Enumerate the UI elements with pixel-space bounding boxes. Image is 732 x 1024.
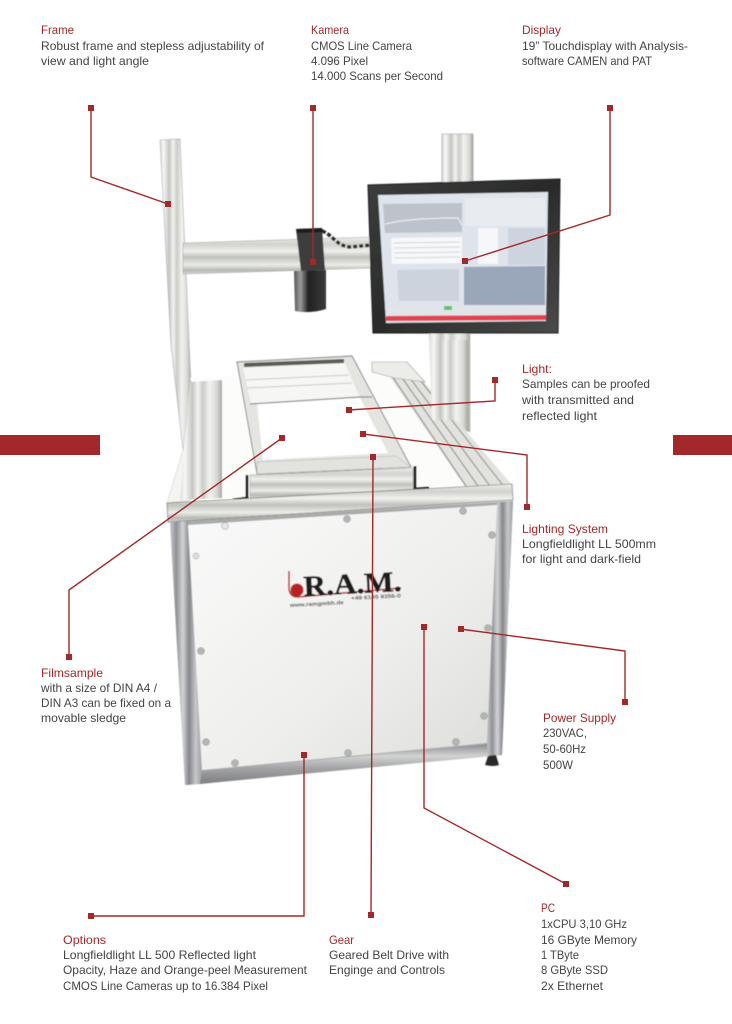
text block: lighting system: Longfieldlight LL 500mm [522, 537, 656, 551]
text block: pc: 8 GByte SSD [541, 963, 608, 977]
sledge sample window [257, 398, 388, 460]
text block: pc: 1xCPU 3,10 GHz [541, 917, 627, 931]
leader: pc [421, 624, 569, 887]
logo phone: +49 6145 9356-0 [351, 593, 401, 602]
text block: power supply: 230VAC, [543, 726, 587, 740]
camera cable [322, 231, 372, 247]
text block: gear: Enginge and Controls [329, 963, 445, 977]
text block: kamera: 14.000 Scans per Second [311, 69, 443, 83]
monitor screen [378, 192, 548, 323]
text block: kamera [311, 23, 443, 83]
text block: frame: view and light angle [41, 54, 149, 68]
text block: frame: Frame [41, 23, 74, 37]
screen chart panel [383, 203, 462, 233]
screen bottom-left view [397, 269, 459, 301]
cabinet white panel [188, 505, 497, 770]
leader: kamera [310, 105, 316, 265]
camera lens [294, 270, 326, 312]
text block: gear: Geared Belt Drive with [329, 948, 449, 962]
text block: power supply: Power Supply [543, 711, 616, 725]
text block: gear [329, 933, 449, 977]
text block: light: reflected light [522, 409, 598, 423]
camera assembly [294, 228, 372, 312]
logo red swoosh [289, 571, 401, 597]
text block: display: Display [522, 23, 561, 37]
screen red status bar [386, 315, 546, 321]
leader: power supply [458, 626, 628, 705]
text block: kamera: 4.096 Pixel [311, 54, 368, 68]
leader: frame [88, 105, 171, 207]
cabinet outer frame [170, 501, 513, 785]
screen bottom-right view [464, 266, 545, 305]
text block: display [522, 23, 688, 68]
sledge upper opening [243, 363, 360, 404]
screen options panel [508, 228, 545, 265]
text block: light: with transmitted and [521, 393, 634, 407]
text block: display: software CAMEN and PAT [522, 54, 653, 68]
logo website: www.ramgmbh.de [289, 600, 344, 609]
text block: frame [41, 23, 265, 68]
text block: options: Options [63, 933, 106, 947]
frame: rear upright post, lower [429, 330, 470, 432]
text block: kamera: Kamera [311, 23, 349, 37]
screen table rows [394, 242, 460, 258]
light housing block [372, 362, 425, 382]
camera body top [296, 228, 323, 233]
right red band [673, 435, 732, 455]
R.A.M. logo [289, 566, 402, 609]
text block: power supply: 500W [543, 758, 574, 772]
front top rail [167, 484, 513, 522]
text block: kamera: CMOS Line Camera [311, 39, 412, 53]
logo red dot [290, 584, 304, 596]
text block: gear: Gear [329, 933, 354, 947]
text block: filmsample: Filmsample [41, 666, 103, 680]
leader: light [346, 377, 498, 413]
screen chart line [385, 218, 462, 225]
frame: left upright post [160, 139, 191, 450]
text block: light [521, 362, 650, 423]
frame: horizontal cross bar [183, 237, 372, 274]
text block: lighting system [522, 522, 656, 566]
text block: filmsample [40, 666, 171, 725]
leader: filmsample [66, 435, 285, 660]
logo letters: R.A.M. [303, 566, 402, 603]
leader: display [462, 105, 613, 264]
screen top-right controls [465, 198, 545, 226]
sledge front beam [250, 468, 413, 498]
screen toolbar [385, 305, 546, 316]
text block: power supply [543, 711, 616, 772]
panel screws [193, 508, 496, 766]
adjustable foot [485, 755, 499, 766]
text block: lighting system: Lighting System [522, 522, 608, 536]
text block: display: 19” Touchdisplay with Analysis- [522, 39, 688, 53]
screen list panel [478, 228, 498, 264]
screen data table [391, 237, 462, 264]
display [368, 179, 560, 333]
leader: lighting system [360, 431, 530, 510]
table right rail [390, 362, 512, 487]
text block: power supply: 50-60Hz [543, 742, 586, 756]
right black bracket [415, 466, 429, 489]
cabinet left profile [170, 521, 202, 785]
text block: pc [541, 901, 637, 993]
movable sledge [233, 356, 429, 500]
screen green button [444, 306, 452, 310]
text block: options: Longfieldlight LL 500 Reflected light [63, 948, 257, 962]
table top surface [190, 373, 465, 498]
cabinet [170, 501, 513, 785]
text block: filmsample: movable sledge [41, 711, 126, 725]
text block: pc: 2x Ethernet [541, 979, 604, 993]
left black bracket [233, 475, 247, 500]
text block: options: Opacity, Haze and Orange-peel Measurement [63, 963, 308, 977]
table right rail grooves [392, 366, 502, 486]
text block: pc: 1 TByte [541, 948, 579, 962]
machine illustration [160, 134, 560, 785]
text block: options [63, 933, 308, 993]
text block: light: Light: [522, 362, 552, 376]
sledge dark back slot [244, 359, 344, 367]
text block: pc: PC [541, 901, 555, 915]
text block: light: Samples can be proofed [522, 377, 650, 391]
monitor bezel [368, 179, 560, 333]
text block: options: CMOS Line Cameras up to 16.384 Pixel [63, 979, 268, 993]
camera body [296, 228, 325, 271]
table left rail [180, 380, 222, 500]
sledge outer frame [237, 356, 411, 474]
table left back edge [167, 381, 191, 503]
sledge inner frame edge [250, 397, 372, 404]
text block: filmsample: with a size of DIN A4 / [40, 681, 158, 695]
frame: rear upright post, upper [442, 134, 473, 184]
text block: pc: 16 GByte Memory [541, 933, 637, 947]
sledge front lip [257, 456, 410, 474]
text block: lighting system: for light and dark-field [522, 552, 641, 566]
sledge upper rail lines [246, 375, 352, 388]
cabinet bottom profile [200, 744, 488, 784]
cabinet right profile [487, 501, 513, 757]
text block: filmsample: DIN A3 can be fixed on a [41, 696, 171, 710]
left red band [0, 435, 100, 455]
rear post lower section over rail [429, 340, 468, 432]
leader: options [88, 752, 307, 919]
text block: frame: Robust frame and stepless adjustability of [41, 39, 265, 53]
leader: gear [368, 454, 376, 918]
